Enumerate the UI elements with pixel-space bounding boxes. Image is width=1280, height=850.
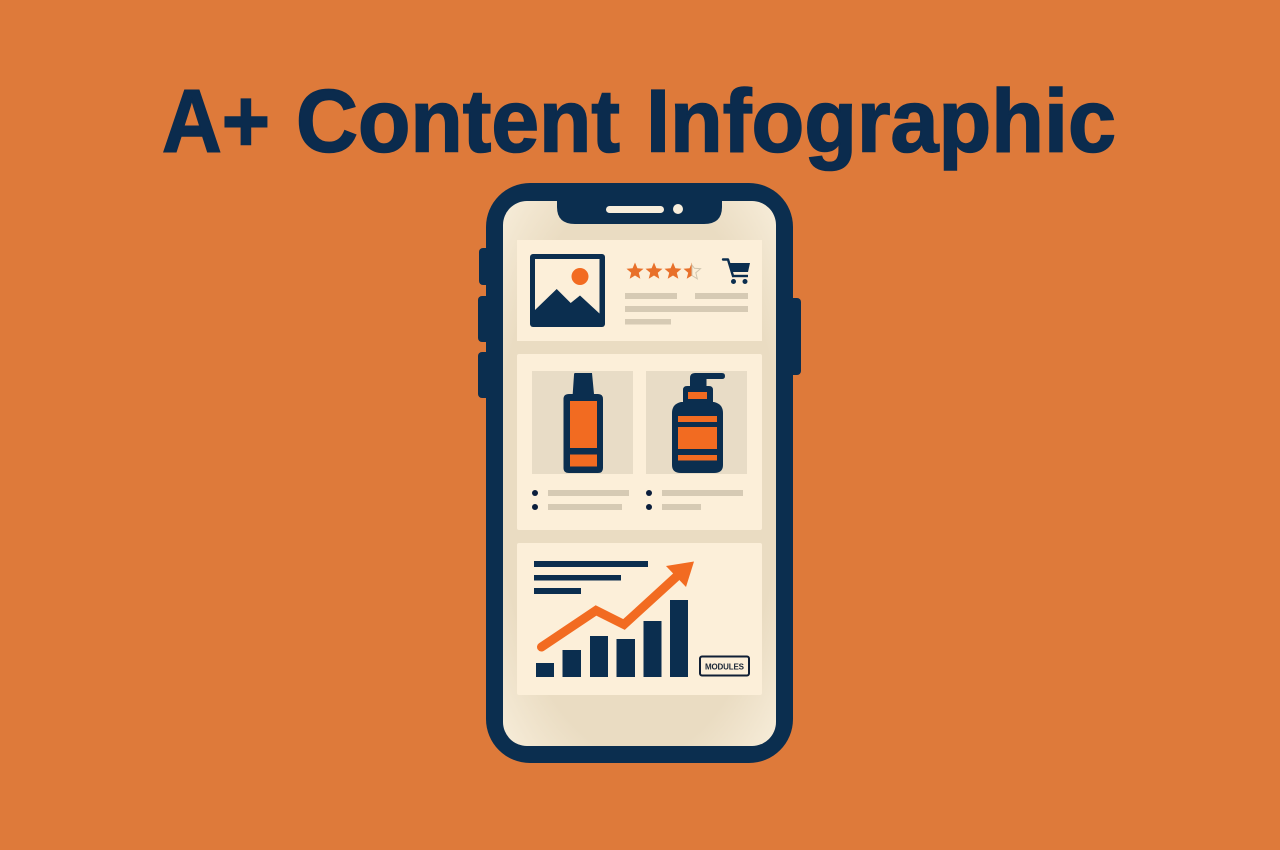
title: Infographic <box>646 70 1116 170</box>
title: A+ <box>162 70 270 170</box>
phone body <box>486 183 793 763</box>
icon: bottle <box>564 373 603 473</box>
panel: growth modules <box>517 543 762 695</box>
bullet list left <box>532 490 629 510</box>
panel: product summary <box>517 240 762 341</box>
title: Content <box>296 70 620 170</box>
panel: product comparison <box>517 354 762 530</box>
text placeholder lines <box>625 293 748 324</box>
side buttons <box>478 248 801 398</box>
icon: star rating <box>626 262 700 279</box>
notch <box>557 199 722 224</box>
product tile left <box>532 371 633 474</box>
icon: shopping cart <box>723 260 750 284</box>
product tile right <box>646 371 747 474</box>
icon: pump bottle <box>672 373 725 473</box>
heading lines <box>534 561 648 594</box>
phone <box>478 183 801 763</box>
modules badge <box>700 656 749 676</box>
bullet list right <box>646 490 743 510</box>
icon: image placeholder <box>530 254 605 327</box>
bar chart <box>536 600 688 677</box>
title <box>162 70 1116 170</box>
arrow: growth trend <box>542 562 694 647</box>
modules badge: MODULES <box>705 662 745 671</box>
screen <box>503 201 776 746</box>
